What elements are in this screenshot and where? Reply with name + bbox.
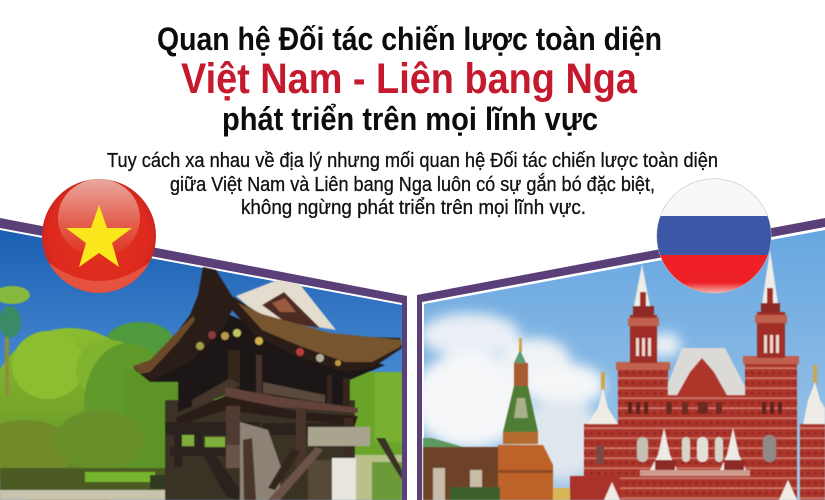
title line 1: Quan hệ Đối tác chiến lược toàn diện: [157, 21, 662, 57]
museum right small tower: [813, 365, 817, 383]
museum right tower: [745, 358, 797, 500]
backing of lower structure: [165, 400, 355, 500]
trees left: [0, 285, 226, 500]
title line 3: phát triển trên mọi lĩnh vực: [222, 101, 598, 137]
pagoda: [133, 267, 402, 500]
title: [157, 21, 662, 137]
lower beams: [165, 422, 260, 435]
intro text block: [107, 150, 718, 219]
roof: [133, 267, 402, 382]
trees right: [345, 372, 402, 500]
panel: Russia photo of Red Square: [412, 226, 825, 500]
museum central body: [663, 395, 747, 500]
intro text block: Tuy cách xa nhau về địa lý nhưng mối quan hệ Đối tác chiến lược toàn diện: [107, 150, 718, 172]
posts upper: [228, 350, 240, 395]
lower columns: [226, 406, 240, 445]
intro text block: không ngừng phát triển trên mọi lĩnh vực.: [241, 197, 586, 219]
floor band: [225, 387, 358, 413]
museum turrets: [650, 428, 677, 470]
icon: Vietnam flag: [42, 179, 156, 296]
panel: Russia frame: [417, 218, 825, 500]
title line 2: Việt Nam - Liên bang Nga: [181, 55, 638, 103]
central pillar: [240, 422, 282, 500]
corner tower: [497, 338, 553, 500]
gable: [236, 277, 336, 330]
panel: Vietnam frame: [0, 218, 407, 500]
stone steps: [308, 427, 370, 446]
intro text block: giữa Việt Nam và Liên bang Nga luôn có sự gắn bó đặc biệt,: [170, 173, 655, 196]
railing: [263, 382, 325, 403]
icon: Russia flag: [655, 178, 773, 294]
museum left small tower: [601, 372, 605, 390]
struts: [204, 456, 240, 500]
museum central roof: [663, 348, 750, 396]
lanterns: [208, 331, 216, 339]
museum windows: [637, 437, 648, 462]
museum left tower: [618, 363, 668, 500]
panel: Vietnam photo of One Pillar Pagoda: [0, 226, 403, 500]
underside of roof: [150, 315, 385, 412]
green roof building: [422, 437, 462, 448]
